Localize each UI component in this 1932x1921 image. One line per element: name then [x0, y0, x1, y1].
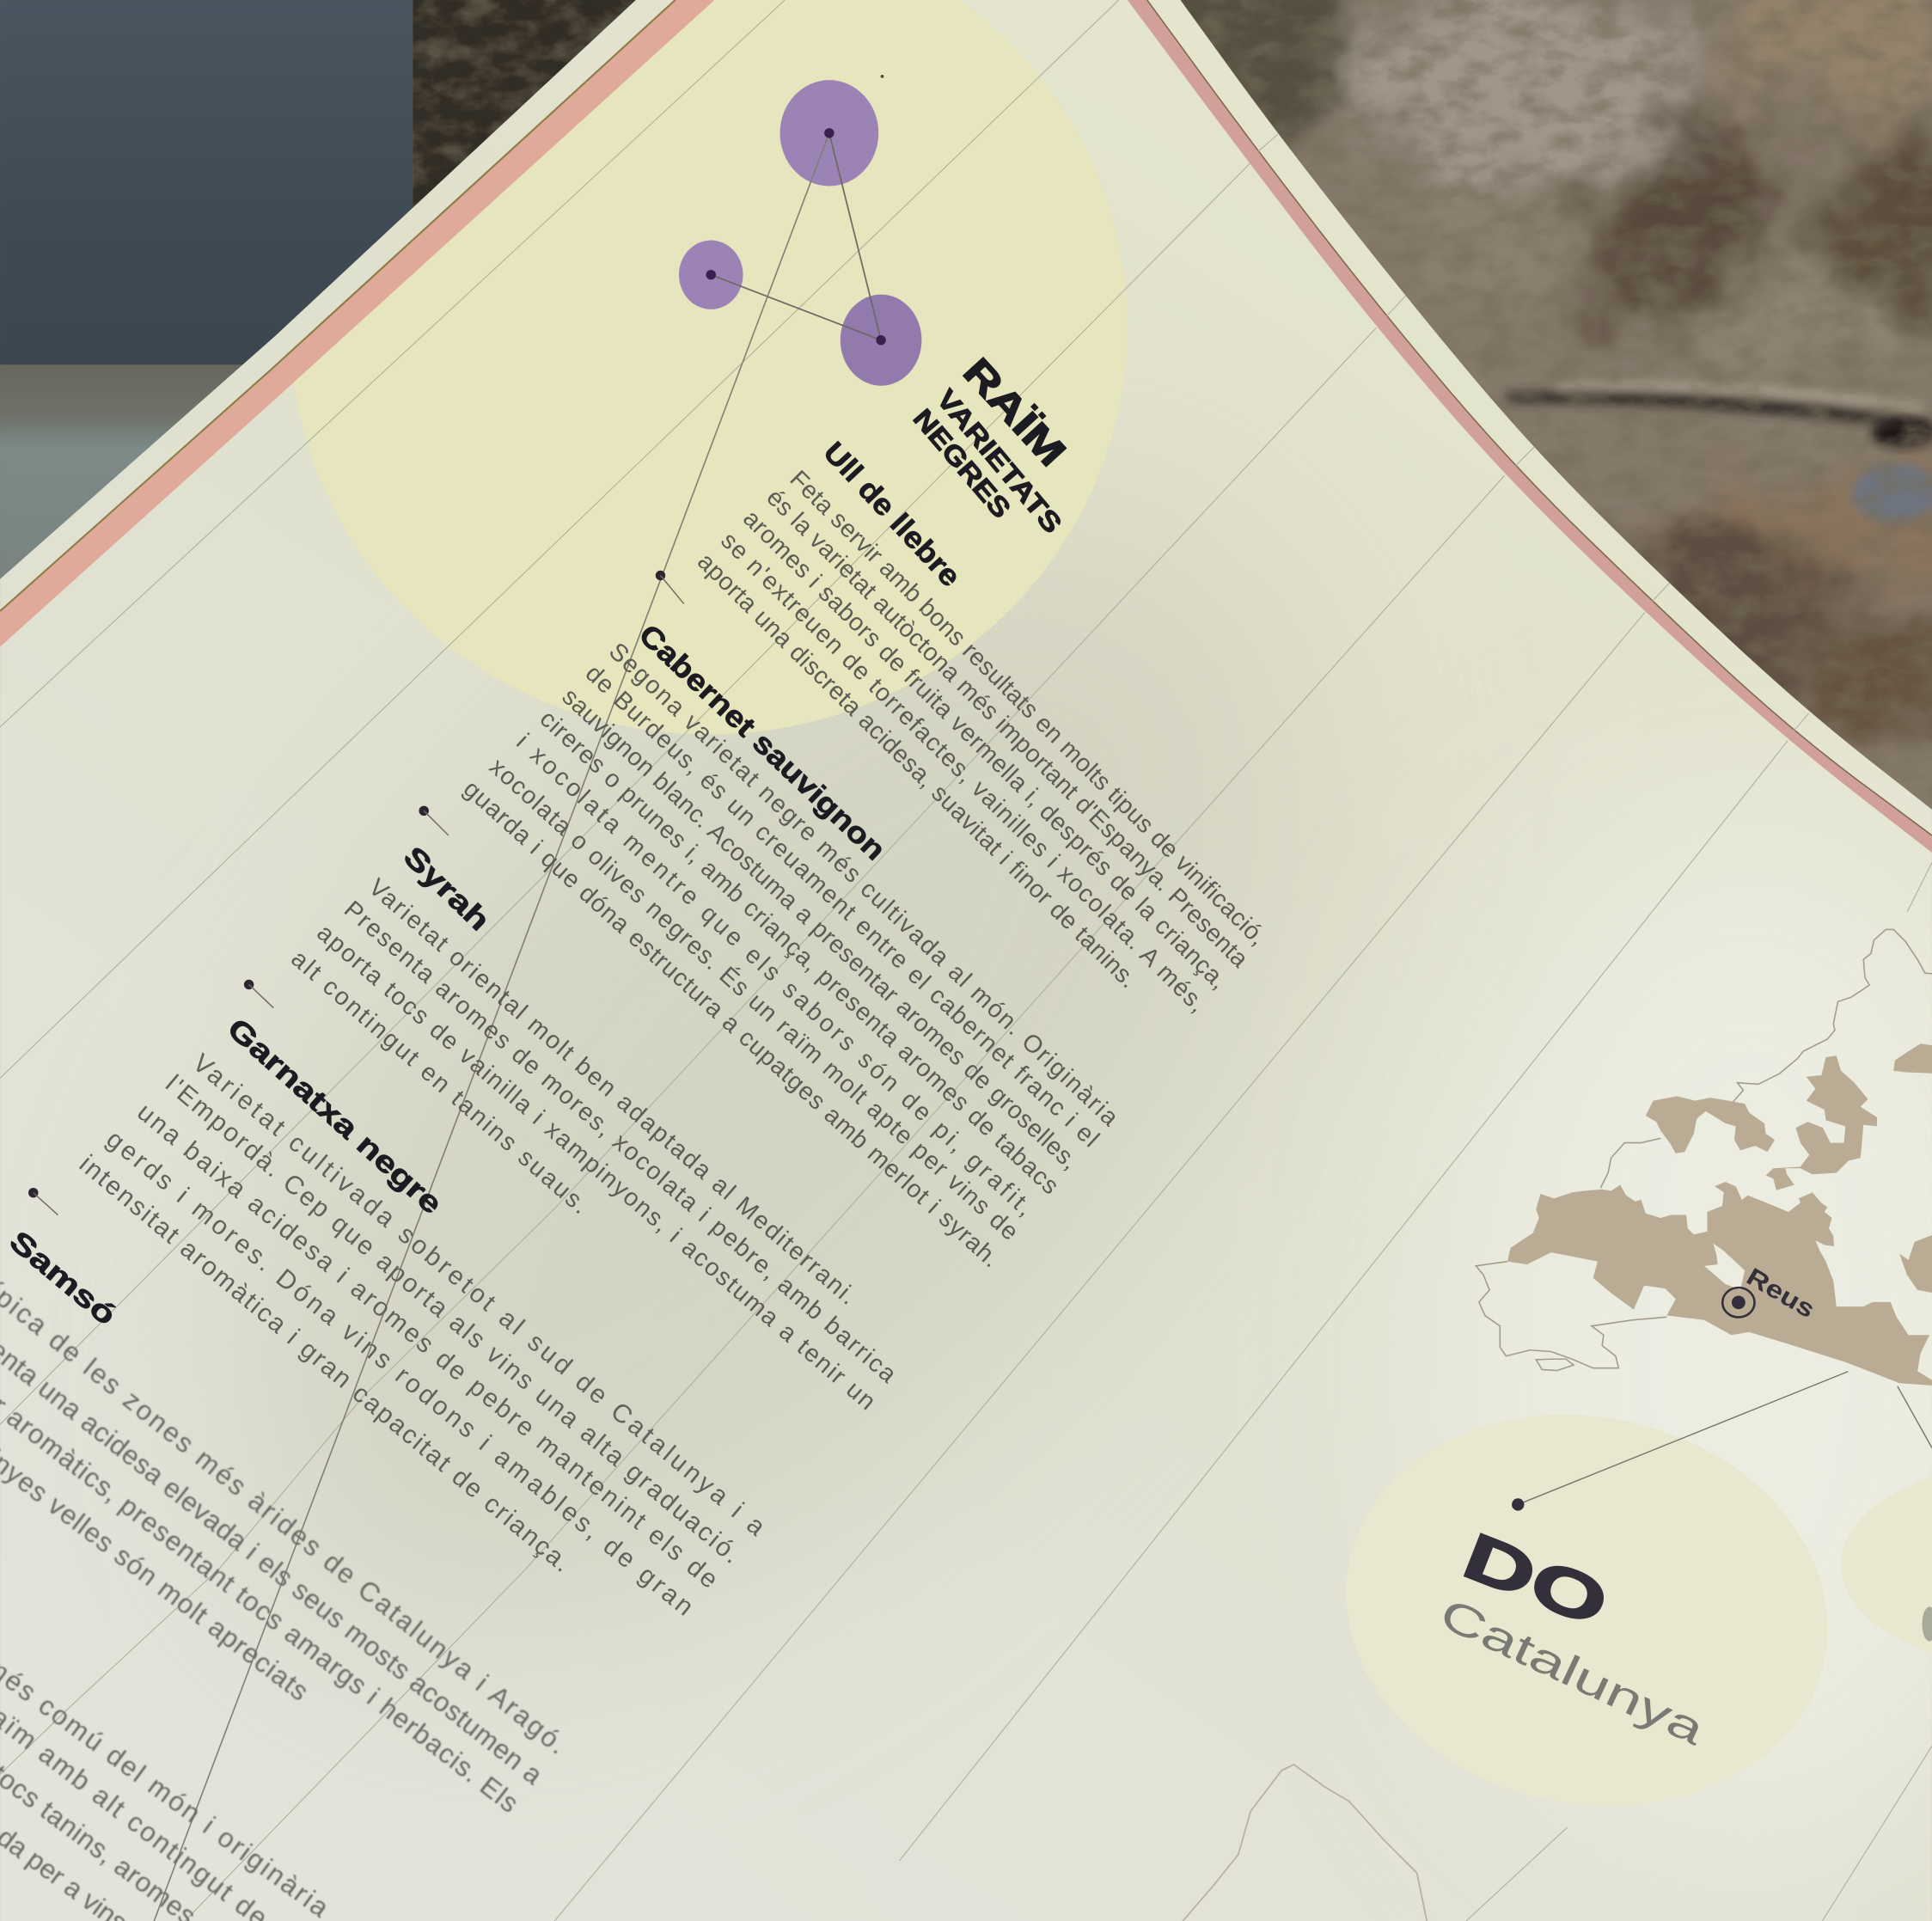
variety: Cabernet sauvignon: Cabernet sauvignon	[633, 618, 891, 866]
variety: Cabernet sauvignon: xocolata o olives negres. És un raïm molt apte per vins de	[484, 752, 1024, 1246]
variety: Garnatxa negre: l'Empordà. Cep que aporta als vins una alta graduació.	[160, 1070, 746, 1569]
variety: Garnatxa negre: una baixa acidesa i aromes de pebre mantenint els de	[131, 1098, 724, 1594]
variety: Cabernet sauvignon: de Burdeus, és un creuament entre el cabernet franc i el	[580, 659, 1104, 1153]
map marker: Reus: Reus	[1742, 1263, 1819, 1324]
variety: Cabernet sauvignon	[458, 571, 1123, 1273]
title: RAÏM VARIETATS NEGRES: RAÏM	[955, 349, 1075, 474]
region: main tan area	[1507, 1182, 1932, 1386]
map marker: Reus	[1722, 1263, 1819, 1324]
variety: Ull de llebre: és la varietat autòctona més important d'Espanya. Presenta	[761, 484, 1253, 973]
variety: Cabernet sauvignon: cireres o prunes i, amb criança, presenta aromes de tabacs	[535, 705, 1064, 1200]
map outline	[1476, 929, 1932, 1371]
variety: Garnatxa negre: Varietat cultivada sobretot al sud de Catalunya i a	[187, 1049, 771, 1541]
variety: Cabernet sauvignon: sauvignon blanc. Acostuma a presentar aromes de groselles,	[557, 683, 1084, 1175]
variety: Ull de llebre: Ull de llebre	[816, 436, 967, 593]
title: RAÏM VARIETATS NEGRES: VARIETATS	[931, 383, 1068, 539]
title: RAÏM VARIETATS NEGRES	[908, 349, 1075, 539]
variety: Ull de llebre: aporta una discreta acidesa, suavitat i finor de tanins.	[692, 548, 1142, 994]
variety: Syrah: Syrah	[397, 841, 496, 938]
variety: Cabernet sauvignon: i xocolata mentre que els sabors són de pi, grafit,	[511, 729, 1039, 1221]
variety: Ull de llebre: aromes i sabors de fruita vermella i, després de la criança,	[737, 505, 1232, 995]
variety: Garnatxa negre: intensitat aromàtica i gran capacitat de criança.	[74, 1150, 576, 1578]
map: Catalonia wine regions	[1476, 929, 1932, 1386]
map: lower region outline	[1183, 1765, 1427, 1921]
variety: Cabernet sauvignon: Segona varietat negre més cultivada al món. Originària	[603, 638, 1123, 1132]
variety: Syrah: Varietat oriental molt ben adaptada al Mediterrani.	[364, 873, 862, 1311]
background: stone wall and window	[0, 0, 1932, 863]
icon: grape constellation	[154, 75, 921, 1921]
variety: Samsó: Samsó	[3, 1225, 122, 1332]
variety: Syrah: Presenta aromes de mores, xocolata i pebre, amb barrica	[339, 896, 902, 1388]
panel: DO Catalunya	[1309, 1371, 1865, 1851]
panel: DO Catalunya: DO	[1453, 1519, 1617, 1641]
pink border right	[1128, 0, 1932, 853]
panel: neighbouring circle, cropped	[1841, 1386, 1932, 1666]
variety: Cabernet sauvignon: guarda i que dóna estructura a cupatges amb merlot i syrah.	[458, 775, 1005, 1273]
region: north-east tan area	[1766, 1055, 1877, 1190]
yellow circle behind grape title	[290, 0, 1128, 734]
variety: Syrah: alt contingut en tanins suaus.	[285, 945, 594, 1220]
variety: Syrah: aporta tocs de vainilla i xampinyons, i acostuma a tenir un	[311, 919, 881, 1416]
variety: Ull de llebre: Feta servir amb bons resultats en molts tipus de vinificació,	[785, 465, 1272, 951]
variety: Ull de llebre: se n'extreuen de torrefactes, vainilles i xocolata. A més,	[715, 527, 1211, 1018]
variety: Garnatxa negre: Garnatxa negre	[221, 1013, 448, 1221]
region: far right tan areas	[1893, 1043, 1932, 1294]
pink border top-left	[0, 0, 715, 647]
variety: Garnatxa negre	[74, 980, 771, 1621]
region: north tan area	[1646, 1096, 1775, 1153]
variety: Garnatxa negre: gerds i mores. Dóna vins rodons i amables, de gran	[101, 1125, 699, 1621]
title: RAÏM VARIETATS NEGRES: NEGRES	[908, 403, 1018, 524]
panel: DO Catalunya: Catalunya	[1433, 1589, 1712, 1754]
variety: Samsó: r aromàtics, presentant tocs amargs i herbacis. Els	[0, 1390, 524, 1819]
